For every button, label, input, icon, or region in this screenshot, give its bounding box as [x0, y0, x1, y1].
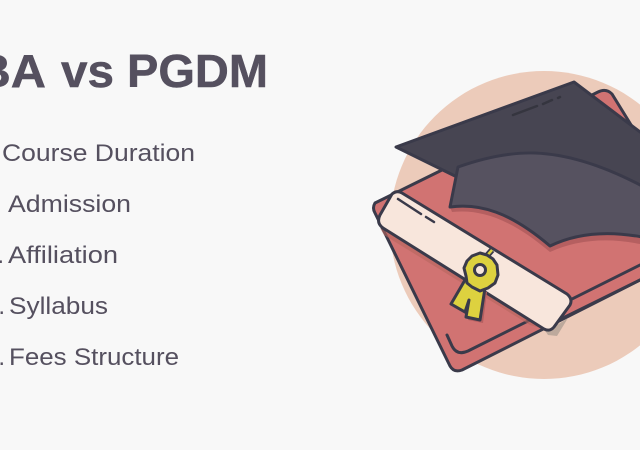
cap body — [450, 153, 640, 246]
scroll shadow on book — [380, 228, 544, 329]
title: PGDM — [127, 45, 268, 97]
background circle — [390, 71, 640, 379]
ribbon seal — [451, 250, 498, 323]
cap top board — [396, 82, 640, 200]
list of topics — [0, 140, 195, 371]
illustration: graduation cap and diploma — [374, 71, 640, 379]
seal stem inner — [484, 250, 492, 259]
ribbon tail — [451, 280, 485, 320]
item: course duration: Course Duration — [2, 140, 195, 167]
seal badge — [464, 253, 498, 291]
diploma scroll — [379, 192, 571, 330]
cap shadow — [450, 206, 640, 252]
item: syllabus: Syllabus — [9, 293, 108, 320]
seal hole — [474, 264, 486, 276]
title — [0, 45, 268, 97]
book — [374, 90, 640, 371]
item: fees structure: Fees Structure — [9, 344, 179, 371]
item: affiliation: Affiliation — [8, 242, 118, 269]
item: admission: Admission — [8, 191, 131, 218]
cap highlight dashes — [513, 97, 560, 115]
title: vs — [61, 45, 114, 97]
ribbon shadow — [453, 287, 487, 323]
book page lines — [447, 255, 640, 353]
seal stem — [485, 250, 492, 258]
diploma text dashes — [398, 199, 434, 222]
scroll shadow on circle — [544, 318, 568, 336]
